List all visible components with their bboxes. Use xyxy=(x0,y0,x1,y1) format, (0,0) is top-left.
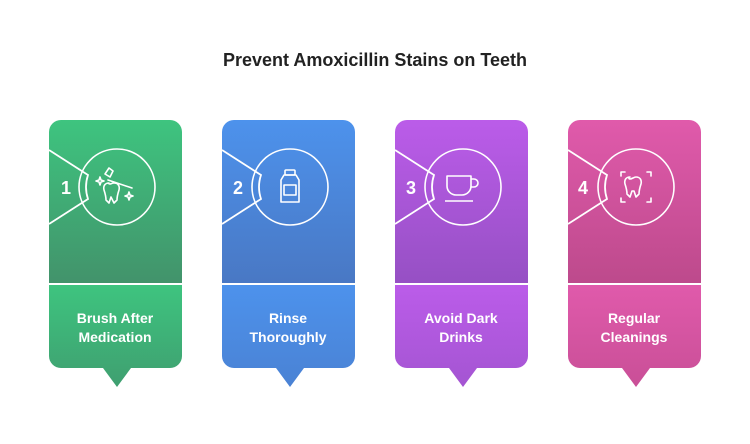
number badge 4: 4 xyxy=(578,178,588,198)
label 3: Drinks xyxy=(439,329,483,345)
icon: tooth scan xyxy=(598,149,674,225)
number badge 3 xyxy=(395,150,434,224)
number badge 1: 1 xyxy=(61,178,71,198)
card 2: Rinse Thoroughly xyxy=(222,120,355,387)
number badge 3: 3 xyxy=(406,178,416,198)
icon: cup xyxy=(425,149,501,225)
label 4: Regular xyxy=(608,310,661,326)
number badge 1 xyxy=(49,150,88,224)
number badge 4 xyxy=(568,150,607,224)
card 3: Avoid Dark Drinks xyxy=(395,120,528,387)
label 3: Avoid Dark xyxy=(424,310,498,326)
label 1: Medication xyxy=(78,329,152,345)
label 2: Rinse xyxy=(269,310,307,326)
icon: mouthwash bottle xyxy=(252,149,328,225)
card 1: Brush After Medication xyxy=(49,120,182,387)
label 4: Cleanings xyxy=(601,329,668,345)
label 1: Brush After xyxy=(77,310,154,326)
number badge 2: 2 xyxy=(233,178,243,198)
label 2: Thoroughly xyxy=(250,329,327,345)
card 4: Regular Cleanings xyxy=(568,120,701,387)
icon: toothbrush tooth xyxy=(79,149,155,225)
number badge 2 xyxy=(222,150,261,224)
title: Prevent Amoxicillin Stains on Teeth xyxy=(223,50,527,70)
